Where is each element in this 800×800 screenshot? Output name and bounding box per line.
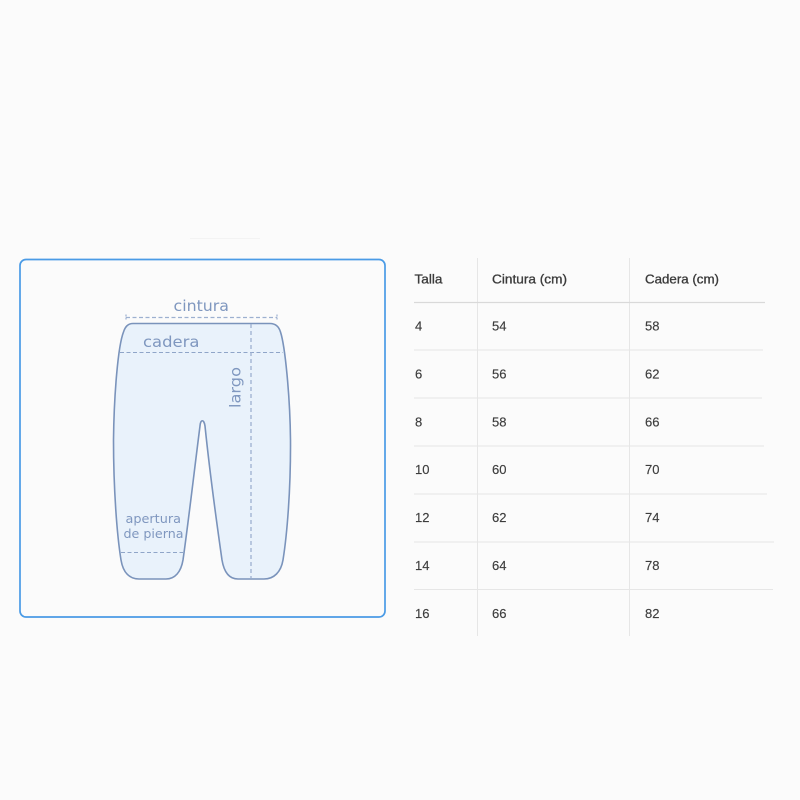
row: talla 12: 74 [645,510,659,525]
row: talla 12 [415,510,659,525]
table header: Cadera (cm) [645,272,719,286]
row: talla 10: 70 [645,462,659,477]
row: talla 10: 10 [415,462,429,477]
measure line: apertura de pierna [121,552,183,554]
row: talla 16: 16 [415,606,429,621]
label: apertura de pierna: de pierna [124,527,184,541]
row: talla 14: 14 [415,558,429,573]
label: cintura: cintura [174,297,229,315]
row: talla 4: 4 [415,318,422,334]
row: talla 6: 6 [415,366,422,382]
size table [414,258,774,636]
label: largo: largo [226,367,244,408]
measure line: cintura [126,314,277,320]
row: talla 8: 8 [415,414,422,430]
row: talla 10 [415,462,659,477]
label: apertura de pierna: apertura [126,512,181,526]
row: talla 4: 58 [645,318,659,334]
row: talla 8: 66 [645,414,659,430]
row: talla 4 [415,318,659,334]
measure line: largo [250,324,252,578]
table header: Cintura (cm) [492,272,567,286]
row: talla 16: 82 [645,606,659,621]
row: talla 14: 64 [492,558,506,573]
row: talla 8: 58 [492,414,506,430]
row: talla 12: 12 [415,510,429,525]
table header [414,272,719,286]
row: talla 8 [415,414,659,430]
row: talla 10: 60 [492,462,506,477]
icon: trousers outline [114,324,291,579]
panel: garment diagram [20,260,385,617]
row: talla 14: 78 [645,558,659,573]
label: cadera: cadera [143,333,200,351]
row: talla 16 [415,606,659,621]
measure line: cadera [120,352,283,354]
table header: Talla [414,272,443,286]
row: talla 4: 54 [492,318,506,334]
row: talla 6 [415,366,659,382]
row: talla 6: 56 [492,366,506,382]
row: talla 14 [415,558,659,573]
row: talla 12: 62 [492,510,506,525]
label: apertura de pierna [124,512,184,541]
row: talla 6: 62 [645,366,659,382]
row: talla 16: 66 [492,606,506,621]
